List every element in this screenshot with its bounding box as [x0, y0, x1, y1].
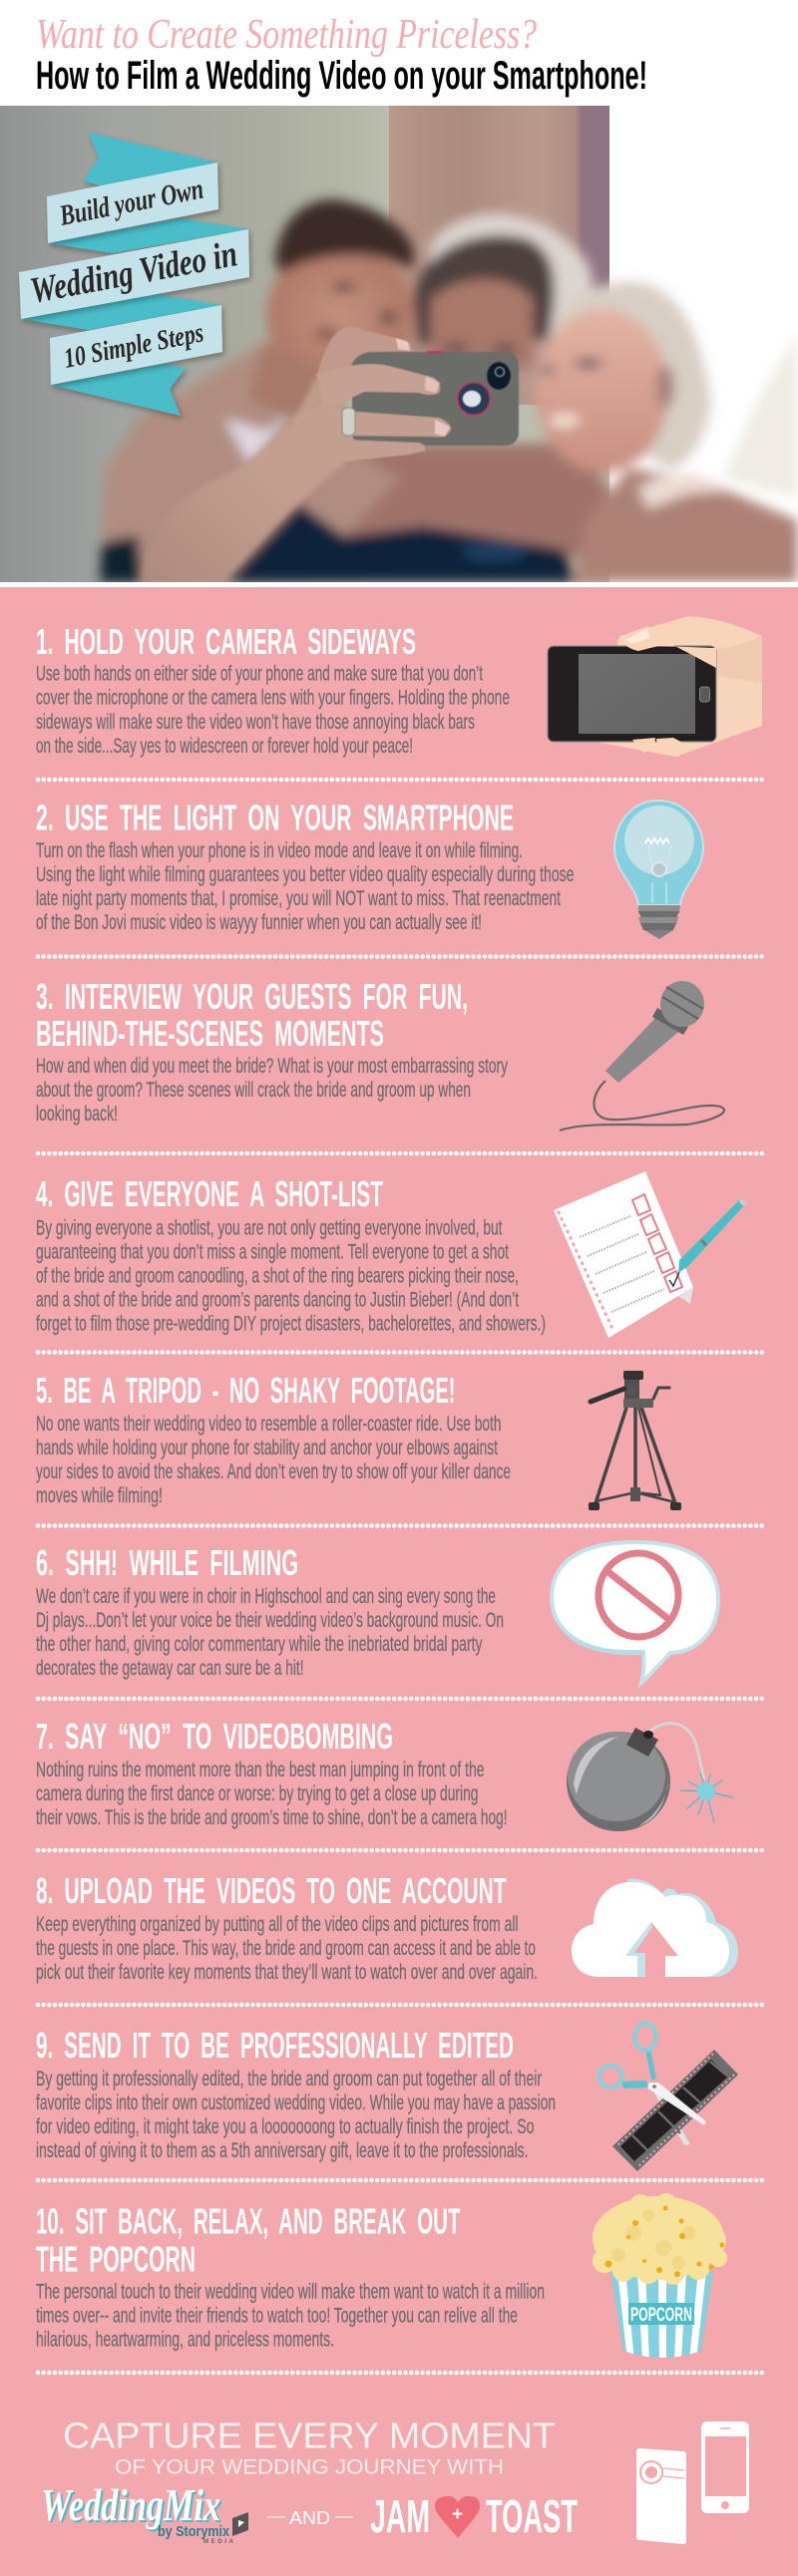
connector: AND: [267, 2508, 353, 2528]
icon: hand holding phone sideways: [548, 616, 762, 757]
step 4 body: [36, 1216, 546, 1336]
step 4 body: forget to film those pre-wedding DIY project disasters, bachelorettes, and showers.): [36, 1312, 546, 1336]
icon: speech bubble with no sign: [552, 1542, 718, 1683]
step 3 heading: [36, 976, 468, 1054]
step 8 body: [36, 1913, 538, 1984]
step 2 body: [36, 839, 575, 934]
step 1 body: on the side...Say yes to widescreen or forever hold your peace!: [36, 735, 413, 758]
step 5 body: [36, 1413, 511, 1507]
logo: WeddingMix by Storymix Media: WeddingMix: [43, 2481, 222, 2532]
step 1 heading: 1. HOLD YOUR CAMERA SIDEWAYS: [36, 621, 416, 662]
step 8 body: pick out their favorite key moments that they’ll want to watch over and over again.: [36, 1961, 538, 1984]
step 10 heading: THE POPCORN: [36, 2239, 196, 2279]
step 6 body: [36, 1585, 504, 1680]
step 1 body: [36, 662, 510, 758]
step 7 body: camera during the first dance or worse: by trying to get a close up during: [36, 1782, 479, 1805]
step 3 heading: 3. INTERVIEW YOUR GUESTS FOR FUN,: [36, 976, 468, 1017]
ribbon panel 1: Build your Own: [56, 173, 206, 232]
step 3 body: [36, 1055, 508, 1126]
icon: checklist and pen: [554, 1171, 747, 1338]
step 5 heading: 5. BE A TRIPOD - NO SHAKY FOOTAGE!: [36, 1370, 455, 1411]
connector: AND: AND: [289, 2508, 330, 2528]
step 7 body: [36, 1759, 507, 1829]
separator: [38, 1848, 762, 1852]
step 10 body: times over-- and invite their friends to watch too! Together you can relive all the: [36, 2305, 518, 2327]
icon: popcorn bucket: [593, 2193, 727, 2361]
logo: Jam + Toast: TOAST: [486, 2490, 578, 2542]
icon: cloud upload: [572, 1879, 738, 1977]
step 9 body: instead of giving it to them as a 5th anniversary gift, leave it to the professionals.: [36, 2139, 529, 2162]
hero photo: three women filming a selfie: [0, 106, 798, 582]
step 2: [36, 798, 703, 939]
step 1 body: sideways will make sure the video won’t have those annoying black bars: [36, 711, 475, 734]
logo: Jam + Toast: [370, 2490, 578, 2542]
logo: WeddingMix by Storymix Media: by Storymix: [158, 2523, 230, 2540]
step 3 body: looking back!: [36, 1103, 118, 1126]
step 5 body: your sides to avoid the shakes. And don’t even try to show off your killer dance: [36, 1460, 511, 1483]
step 4 body: guaranteeing that you don’t miss a single moment. Tell everyone to get a shot: [36, 1240, 509, 1264]
step 5 body: moves while filming!: [36, 1484, 163, 1507]
step 4 heading: 4. GIVE EVERYONE A SHOT-LIST: [36, 1173, 383, 1214]
step 4 body: By giving everyone a shotlist, you are not only getting everyone involved, but: [36, 1216, 503, 1240]
ribbon panel 3: 10 Simple Steps: [61, 317, 206, 375]
step 5 body: hands while holding your phone for stability and anchor your elbows against: [36, 1437, 498, 1459]
step 9 body: By getting it professionally edited, the bride and groom can put together all of their: [36, 2068, 542, 2091]
icon: light bulb: [614, 801, 703, 939]
step 8: [36, 1870, 738, 1984]
logo: Jam + Toast: +: [452, 2504, 463, 2525]
icon: tripod: [589, 1371, 681, 1510]
footer: [41, 2415, 749, 2545]
step 6: [36, 1542, 718, 1683]
step 3 body: How and when did you meet the bride? What is your most embarrassing story: [36, 1055, 508, 1078]
step 6 body: We don’t care if you were in choir in Highschool and can sing every song the: [36, 1585, 496, 1608]
icon: microphone: [560, 981, 724, 1130]
step 5: [36, 1370, 681, 1510]
icon: scissors cutting film: [598, 2024, 738, 2171]
icon: flip video camera: [636, 2448, 686, 2544]
title: script line: Want to Create Something Priceless?: [36, 12, 537, 58]
step 4: [36, 1171, 747, 1338]
ribbon banner: Build your Own Wedding Video in 10 Simple Steps: [19, 133, 249, 416]
step 6 heading: 6. SHH! WHILE FILMING: [36, 1542, 298, 1583]
step 7 heading: 7. SAY “NO” TO VIDEOBOMBING: [36, 1716, 393, 1757]
ribbon tails and folds: [21, 133, 248, 416]
arm in foreground: [143, 376, 351, 582]
step 8 body: Keep everything organized by putting all of the video clips and pictures from all: [36, 1913, 519, 1936]
step 1 body: Use both hands on either side of your phone and make sure that you don’t: [36, 662, 483, 686]
separator: [38, 2003, 762, 2007]
step 3 heading: BEHIND-THE-SCENES MOMENTS: [36, 1013, 384, 1054]
footer subhead: OF YOUR WEDDING JOURNEY WITH: [115, 2456, 504, 2478]
separator: [38, 2178, 762, 2182]
phone in hand: [316, 327, 519, 461]
logo: Jam + Toast: JAM: [370, 2490, 430, 2542]
step 9 body: for video editing, it might take you a looooooong to actually finish the project. So: [36, 2115, 535, 2138]
step 9 body: [36, 2068, 556, 2162]
icon: bomb with lit fuse: [567, 1724, 733, 1831]
ribbon panel 1: [47, 162, 218, 243]
ribbon panel 3: [50, 305, 222, 385]
step 9: [36, 2024, 738, 2171]
step 1: [36, 616, 762, 758]
step 7 body: their vows. This is the bride and groom’s time to shine, don’t be a camera hog!: [36, 1806, 507, 1829]
separator: [38, 1151, 762, 1155]
step 8 body: the guests in one place. This way, the bride and groom can access it and be able to: [36, 1937, 536, 1960]
step 10 body: hilarious, heartwarming, and priceless moments.: [36, 2329, 334, 2351]
step 10 body: The personal touch to their wedding video will make them want to watch it a million: [36, 2281, 545, 2303]
separator: [38, 2371, 762, 2375]
separator: [38, 1523, 762, 1528]
step 10 body: [36, 2281, 545, 2351]
icon: popcorn bucket: POPCORN: [630, 2305, 692, 2326]
step 3 body: about the groom? These scenes will crack the bride and groom up when: [36, 1079, 471, 1102]
step 2 body: Turn on the flash when your phone is in video mode and leave it on while filming.: [36, 839, 523, 862]
step 7 body: Nothing ruins the moment more than the best man jumping in front of the: [36, 1759, 485, 1781]
step 10 heading: 10. SIT BACK, RELAX, AND BREAK OUT: [36, 2201, 461, 2241]
hero divider band: [0, 582, 798, 587]
step 5 body: No one wants their wedding video to resemble a roller-coaster ride. Use both: [36, 1413, 501, 1436]
logo: WeddingMix by Storymix Media: [41, 2479, 248, 2545]
logo: WeddingMix by Storymix Media: MEDIA: [203, 2539, 234, 2545]
separator: [38, 954, 762, 959]
logo: WeddingMix by Storymix Media: WeddingMix: [41, 2479, 220, 2530]
step 10: [36, 2193, 727, 2361]
icon: smartphone: [701, 2421, 749, 2513]
separator: [38, 1697, 762, 1701]
pink main panel background: [0, 587, 798, 2576]
white header background: [0, 0, 798, 106]
ribbon panel 2: Wedding Video in: [27, 233, 240, 312]
step 7: [36, 1716, 733, 1831]
step 4 body: of the bride and groom canoodling, a shot of the ring bearers picking their nose,: [36, 1264, 519, 1288]
separator: [38, 778, 762, 782]
step 10 heading: [36, 2201, 461, 2279]
footer headline: CAPTURE EVERY MOMENT: [63, 2415, 556, 2456]
step 6 body: Dj plays...Don’t let your voice be their wedding video’s background music. On: [36, 1609, 504, 1632]
step 3: [36, 976, 724, 1130]
step 1 body: cover the microphone or the camera lens with your fingers. Holding the phone: [36, 686, 510, 710]
step 6 body: the other hand, giving color commentary while the inebriated bridal party: [36, 1633, 483, 1656]
separator: [38, 1350, 762, 1355]
step 6 body: decorates the getaway car can sure be a hit!: [36, 1657, 303, 1680]
step 4 body: and a shot of the bride and groom’s parents dancing to Justin Bieber! (And don’t: [36, 1288, 519, 1312]
ribbon panel 2: [19, 229, 249, 319]
step 2 body: of the Bon Jovi music video is wayyy funnier when you can actually see it!: [36, 911, 482, 934]
